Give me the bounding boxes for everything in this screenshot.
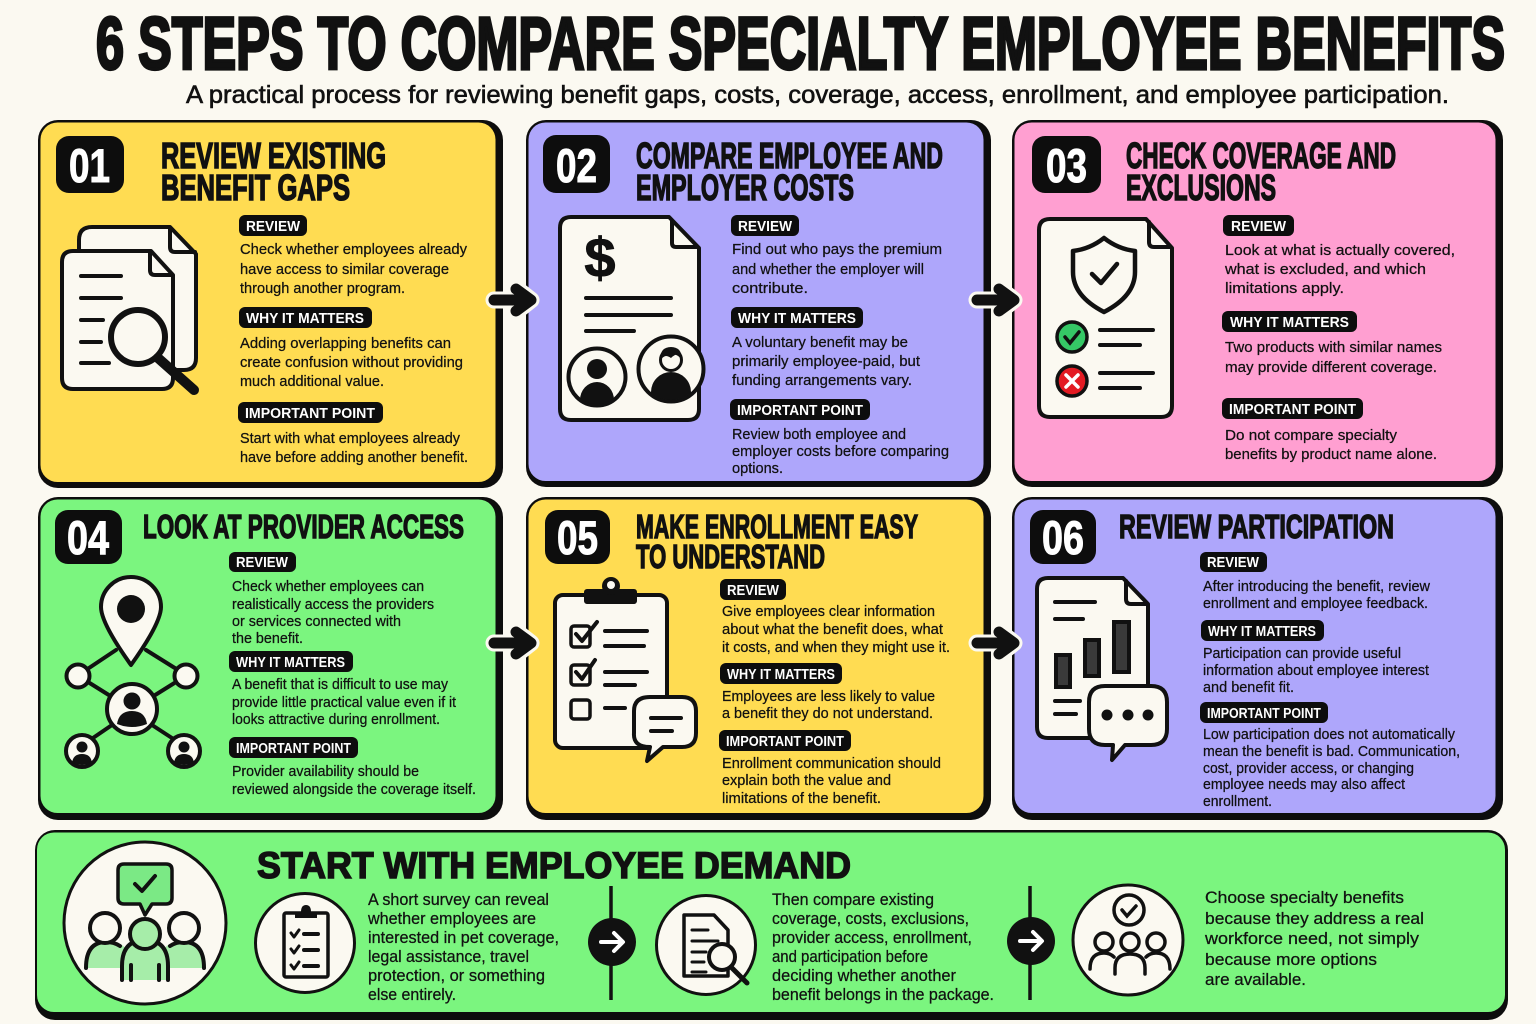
arrow: step 4 to step 5 — [494, 632, 531, 654]
text: why it matters: Participation can provide useful — [1203, 645, 1401, 662]
text: review: After introducing the benefit, review — [1203, 578, 1430, 595]
panel: start with employee demand — [35, 830, 1508, 1020]
text: why it matters — [232, 676, 457, 728]
panel: step 5 make enrollment easy to understand — [526, 497, 991, 820]
label: important point — [229, 737, 358, 758]
text: review: Find out who pays the premium — [732, 241, 942, 258]
text: review: limitations apply. — [1225, 280, 1344, 297]
label: review — [731, 215, 799, 236]
label: important point — [1200, 702, 1328, 723]
arrow: divider two — [1007, 886, 1055, 1000]
text: survey: interested in pet coverage, — [368, 929, 559, 947]
text: review — [732, 241, 942, 297]
icon: survey clipboard — [256, 894, 354, 992]
text: review: Check whether employees already — [240, 241, 467, 258]
text: why it matters: primarily employee-paid, but — [732, 353, 921, 370]
text: review: it costs, and when they might use it. — [722, 639, 950, 656]
text: review: contribute. — [732, 280, 808, 297]
panel: step 6 review participation — [1012, 497, 1503, 820]
text: review: Look at what is actually covered, — [1225, 242, 1455, 259]
heading — [161, 135, 386, 208]
text: why it matters — [1203, 645, 1430, 696]
heading: REVIEW PARTICIPATION — [1119, 508, 1394, 545]
text: important point: Provider availability should be — [232, 763, 419, 780]
text: important point — [1203, 726, 1460, 810]
panel: step 1 review existing benefit gaps — [38, 120, 503, 488]
step number 05: 05 — [557, 511, 598, 564]
heading: BENEFIT GAPS — [161, 167, 350, 208]
arrow: step 5 to step 6 — [977, 632, 1014, 654]
text: review: enrollment and employee feedback. — [1203, 595, 1428, 612]
text: review — [1203, 578, 1430, 612]
arrow: divider one — [588, 886, 636, 1000]
label: important point: IMPORTANT POINT — [1207, 706, 1321, 722]
label: review: REVIEW — [246, 219, 300, 235]
label: why it matters — [229, 651, 353, 672]
text: review: or services connected with — [232, 613, 401, 630]
text: why it matters: funding arrangements vary. — [732, 372, 912, 389]
panel: step 3 check coverage and exclusions — [1012, 120, 1503, 487]
text: why it matters: information about employee interest — [1203, 662, 1430, 679]
text: why it matters: A benefit that is difficult to use may — [232, 676, 448, 693]
label: important point: IMPORTANT POINT — [245, 406, 375, 422]
label: review — [1200, 552, 1267, 572]
label: why it matters: WHY IT MATTERS — [246, 311, 364, 327]
label: important point: IMPORTANT POINT — [726, 734, 844, 750]
arrow: step 2 to step 3 — [977, 289, 1014, 311]
text: important point — [232, 763, 476, 798]
label: review: REVIEW — [727, 583, 779, 599]
text: compare: coverage, costs, exclusions, — [772, 910, 969, 928]
text: why it matters: may provide different coverage. — [1225, 359, 1437, 376]
text: review: the benefit. — [232, 630, 303, 647]
text: important point: Low participation does not automatically — [1203, 726, 1455, 743]
label: review — [239, 215, 307, 236]
text: conclusion: because they address a real — [1205, 910, 1424, 928]
text: survey: else entirely. — [368, 986, 456, 1004]
step number 04: 04 — [67, 511, 109, 564]
heading — [636, 135, 943, 208]
label: why it matters — [1201, 620, 1324, 641]
text: compare: Then compare existing — [772, 891, 934, 909]
icon: cost document with two people: $ — [584, 226, 616, 289]
text: why it matters: provide little practical value even if it — [232, 694, 457, 711]
text: compare: benefit belongs in the package. — [772, 986, 994, 1004]
step number 03: 03 — [1046, 139, 1087, 192]
text: review: Check whether employees can — [232, 578, 424, 595]
text: review: Give employees clear information — [722, 603, 935, 620]
text: important point: employee needs may also affect — [1203, 776, 1406, 793]
heading: MAKE ENROLLMENT EASY — [636, 508, 918, 545]
panel: step 2 compare employee and employer costs — [526, 120, 991, 487]
panel: step 4 look at provider access — [38, 497, 503, 820]
text: review: about what the benefit does, what — [722, 621, 944, 638]
text: why it matters: Adding overlapping benefits can — [240, 335, 451, 352]
text: why it matters: create confusion without providing — [240, 354, 463, 371]
text: important point: Start with what employees already — [240, 430, 460, 447]
step number 01: 01 — [69, 139, 110, 192]
label: why it matters: WHY IT MATTERS — [727, 667, 835, 683]
text: important point: limitations of the benefit. — [722, 790, 881, 807]
label: why it matters: WHY IT MATTERS — [1230, 315, 1349, 331]
text: important point — [722, 755, 941, 807]
text: important point — [240, 430, 468, 466]
text: important point — [732, 426, 949, 477]
text: important point: employer costs before comparing — [732, 443, 949, 460]
text: important point: Enrollment communication should — [722, 755, 941, 772]
text: survey: whether employees are — [367, 910, 536, 928]
icon: workforce with check — [1073, 885, 1183, 995]
heading: COMPARE EMPLOYEE AND — [636, 135, 943, 176]
heading: REVIEW EXISTING — [161, 135, 386, 176]
heading: EMPLOYER COSTS — [636, 167, 854, 208]
text: conclusion: Choose specialty benefits — [1205, 889, 1404, 907]
text: review — [722, 603, 950, 656]
text: survey — [367, 891, 559, 1004]
text: why it matters: looks attractive during enrollment. — [232, 711, 440, 728]
text: why it matters — [722, 688, 935, 722]
text: important point: mean the benefit is bad. Communication, — [1203, 743, 1460, 760]
text: conclusion: are available. — [1205, 971, 1306, 989]
text: review: through another program. — [240, 280, 405, 297]
text: review: what is excluded, and which — [1224, 261, 1426, 278]
label: why it matters: WHY IT MATTERS — [236, 655, 345, 671]
label: important point — [719, 730, 851, 751]
label: review: REVIEW — [1207, 555, 1259, 571]
text: review: realistically access the providers — [232, 596, 434, 613]
label: review — [229, 552, 296, 572]
arrow: step 1 to step 2 — [494, 289, 531, 311]
heading: TO UNDERSTAND — [636, 538, 825, 575]
text: compare: deciding whether another — [772, 967, 956, 985]
text: important point: reviewed alongside the coverage itself. — [232, 781, 476, 798]
text: review: and whether the employer will — [732, 261, 924, 278]
icon: location pin and provider network — [66, 577, 200, 767]
text: review — [1224, 242, 1455, 297]
text: compare — [772, 891, 994, 1004]
text: important point: benefits by product name alone. — [1225, 446, 1437, 463]
text: survey: A short survey can reveal — [368, 891, 549, 909]
label: why it matters: WHY IT MATTERS — [1208, 624, 1316, 640]
text: compare: and participation before — [772, 948, 928, 966]
text: why it matters: much additional value. — [240, 373, 384, 390]
text: why it matters: and benefit fit. — [1203, 679, 1294, 696]
text: why it matters: a benefit they do not understand. — [722, 705, 933, 722]
icon: report chart with chat bubble — [1037, 578, 1167, 760]
heading: LOOK AT PROVIDER ACCESS — [143, 508, 464, 545]
heading: START WITH EMPLOYEE DEMAND — [257, 845, 851, 886]
icon: documents with magnifier — [62, 227, 196, 390]
icon: cost document with two people — [560, 217, 704, 420]
text: survey: legal assistance, travel — [368, 948, 529, 966]
step number 06: 06 — [1042, 511, 1084, 564]
text: compare: provider access, enrollment, — [772, 929, 972, 947]
text: important point: explain both the value and — [722, 772, 891, 789]
text: review — [232, 578, 434, 647]
text: important point — [1225, 427, 1437, 463]
heading — [636, 508, 918, 575]
label: important point: IMPORTANT POINT — [1229, 402, 1356, 418]
label: review: REVIEW — [738, 219, 792, 235]
label: review: REVIEW — [236, 555, 288, 571]
text: why it matters — [240, 335, 463, 390]
label: review — [720, 579, 786, 600]
heading: EXCLUSIONS — [1126, 167, 1276, 208]
text: conclusion — [1204, 889, 1424, 989]
text: why it matters: A voluntary benefit may be — [732, 334, 908, 351]
text: important point: options. — [732, 460, 783, 477]
text: review — [240, 241, 467, 297]
label: why it matters: WHY IT MATTERS — [738, 311, 856, 327]
text: important point: enrollment. — [1203, 793, 1272, 810]
label: important point: IMPORTANT POINT — [737, 403, 863, 419]
text: why it matters — [732, 334, 921, 389]
label: review: REVIEW — [1231, 219, 1286, 235]
text: important point: have before adding another benefit. — [240, 449, 468, 466]
label: review — [1223, 215, 1294, 236]
label: why it matters — [1222, 311, 1357, 332]
step number 02: 02 — [556, 139, 597, 192]
icon: clipboard checklist with speech bubble — [555, 577, 696, 761]
heading — [1126, 135, 1396, 208]
subtitle: A practical process for reviewing benefit gaps, costs, coverage, access, enrollment, and employee participation. — [186, 81, 1449, 109]
text: conclusion: workforce need, not simply — [1204, 930, 1420, 948]
label: why it matters — [720, 663, 842, 684]
label: important point: IMPORTANT POINT — [236, 741, 351, 757]
text: important point: Review both employee and — [732, 426, 906, 443]
icon: document with magnifier — [656, 896, 756, 994]
text: why it matters — [1225, 339, 1442, 376]
text: review: have access to similar coverage — [240, 261, 449, 278]
text: survey: protection, or something — [368, 967, 545, 985]
icon: employees with survey speech bubble — [64, 842, 226, 1004]
text: why it matters: Two products with similar names — [1225, 339, 1442, 356]
text: important point: cost, provider access, or changing — [1203, 760, 1414, 777]
text: why it matters: Employees are less likely to value — [722, 688, 935, 705]
text: conclusion: because more options — [1205, 951, 1377, 969]
text: important point: Do not compare specialty — [1225, 427, 1398, 444]
icon: shield document with check and cross — [1039, 219, 1172, 417]
